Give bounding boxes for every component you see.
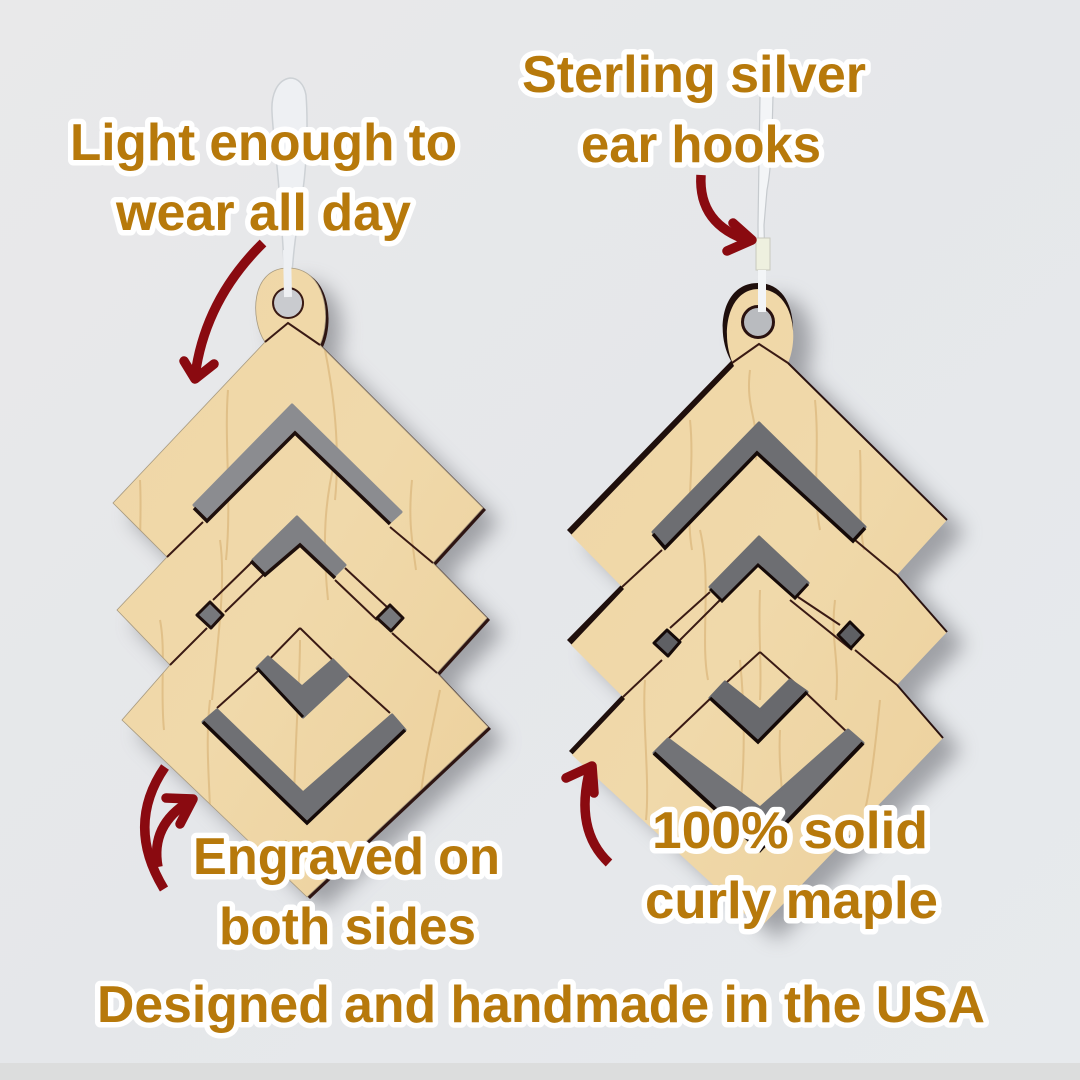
arrow: engraved inner curve: [157, 798, 193, 867]
arrow: curly maple: [566, 766, 609, 863]
small squares: [654, 630, 680, 656]
slot 1: [194, 405, 401, 522]
right ear hook: [758, 96, 773, 312]
right upper-right edge: [788, 363, 947, 738]
text: wear all day: wear all day: [115, 184, 411, 242]
right earring shadow: [586, 297, 965, 940]
left wood grain: [140, 350, 440, 895]
right wood grain: [644, 370, 880, 830]
left hook lower shaft: [287, 250, 288, 297]
text: designed and handmade: Designed and handmade in the USA: [97, 976, 985, 1034]
right hook lower shaft: [758, 270, 766, 312]
slot 4: [654, 730, 863, 850]
slot 1: [653, 423, 865, 547]
text: ear hooks: ear hooks: [581, 116, 821, 174]
right chevron slots: [653, 423, 865, 850]
left earring: [113, 78, 504, 911]
right earring: [567, 96, 965, 940]
text: curly maple: curly maple: [645, 872, 938, 930]
left wood body: [113, 268, 488, 897]
text: sterling silver: Sterling silver: [522, 46, 866, 104]
right wood body: [571, 289, 947, 928]
left dark edge: [116, 270, 491, 899]
small squares: [197, 602, 223, 628]
left chevron slots: [194, 405, 405, 823]
text: light enough to: Light enough to: [70, 114, 457, 172]
right hook hole: [742, 306, 774, 338]
left ear hook: [272, 78, 307, 290]
hook collar: [756, 238, 770, 270]
text: engraved on: Engraved on: [193, 828, 500, 886]
arrow: engraved outer curve: [145, 767, 165, 889]
right dark edge: [567, 283, 946, 926]
slot 3: [257, 657, 348, 717]
arrow: light enough: [184, 243, 263, 379]
slot 4: [203, 710, 405, 823]
slot 2: [253, 517, 345, 575]
left cut lines: [167, 323, 437, 713]
right cut lines: [622, 344, 897, 739]
left hook hole: [273, 288, 303, 318]
slot 3: [710, 680, 807, 742]
slot 2: [710, 537, 808, 600]
text: both sides: both sides: [219, 898, 476, 956]
left earring shadow: [129, 282, 504, 911]
text: 100% solid: 100% solid: [652, 802, 928, 860]
arrow: ear hooks: [701, 175, 752, 251]
